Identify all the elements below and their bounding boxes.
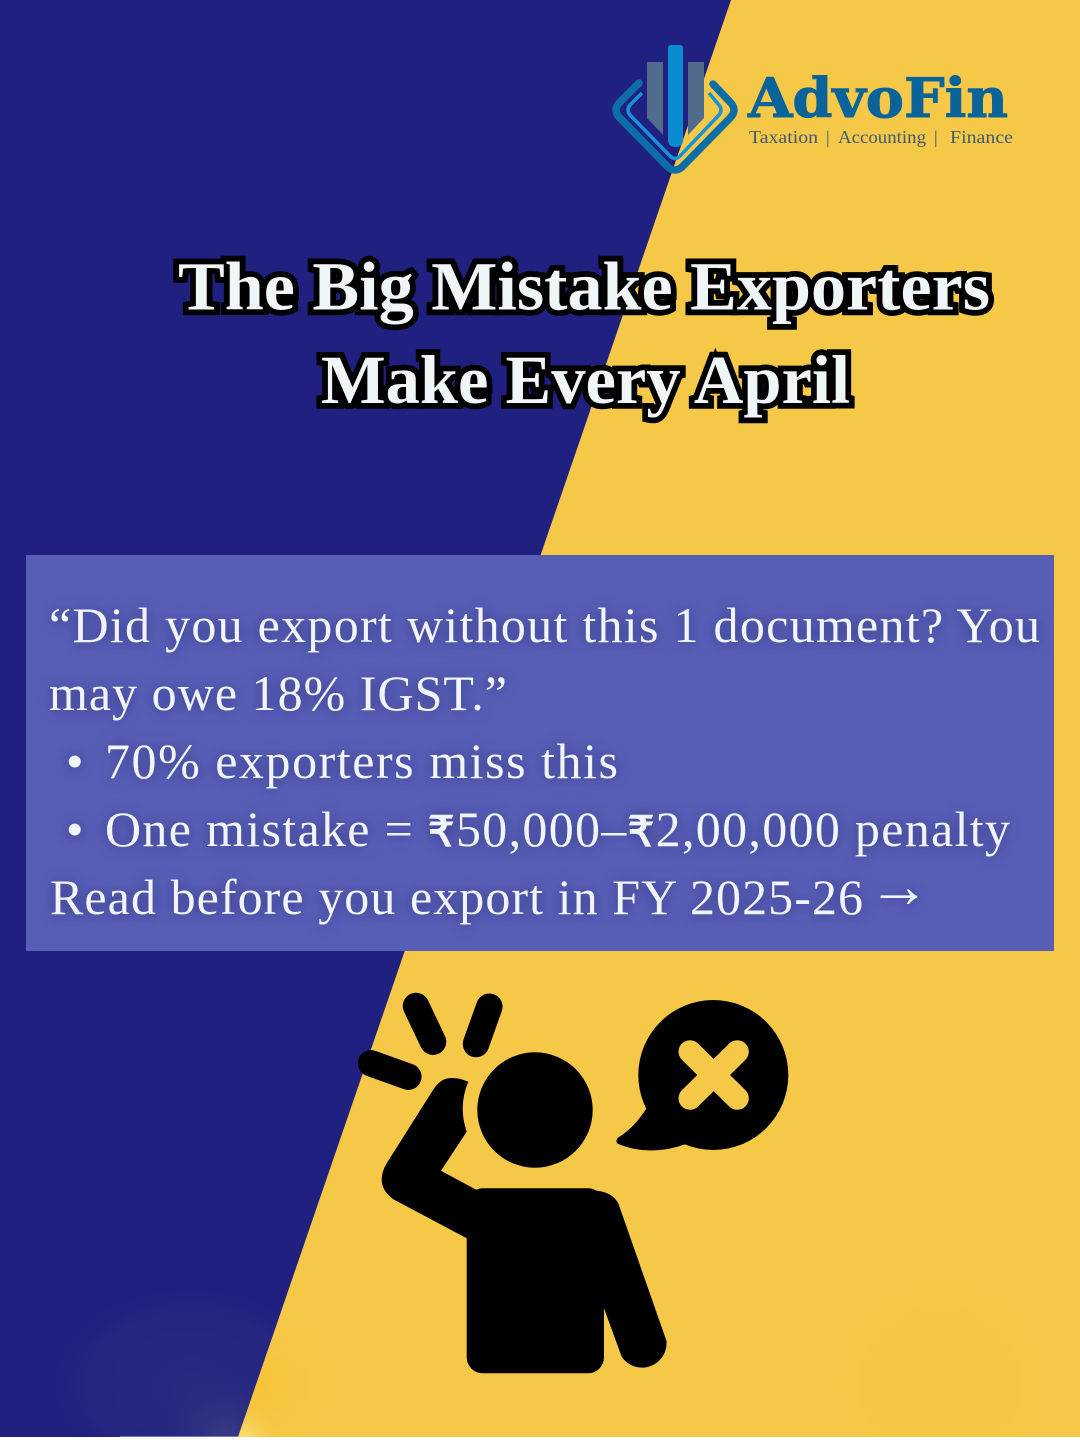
panel text: • [66, 801, 84, 857]
person head [477, 1052, 593, 1168]
title [178, 248, 990, 418]
logo wordmark: AdvoFin [747, 66, 1008, 130]
smudge: bottom left retouched patch [120, 1310, 284, 1437]
impact marks [371, 1006, 489, 1077]
panel: hook message [26, 555, 1054, 951]
title: The Big Mistake Exporters [178, 248, 990, 324]
logo tagline: Taxation [749, 127, 818, 147]
person body [467, 1188, 604, 1373]
panel text: Read before you export in FY 2025-26 [50, 869, 863, 925]
panel text: → [868, 853, 930, 921]
person lowered arm [590, 1190, 667, 1368]
logo tagline: Accounting [838, 127, 926, 147]
panel text: One mistake = ₹50,000–₹2,00,000 penalty [105, 801, 1010, 857]
title: Make Every April [321, 342, 850, 418]
logo tagline: Finance [950, 127, 1013, 147]
logo tagline: | [826, 127, 830, 147]
panel text: “Did you export without this 1 document? You [49, 597, 1040, 653]
panel text [49, 597, 1040, 925]
icon: confused person with error speech bubble [371, 1000, 788, 1373]
panel text: • [66, 733, 84, 789]
person raised arm [382, 1078, 480, 1238]
logo tagline [749, 127, 1013, 147]
panel text: may owe 18% IGST.” [49, 665, 507, 721]
panel text: 70% exporters miss this [105, 733, 618, 789]
speech bubble [616, 1000, 788, 1150]
logo tagline: | [934, 127, 938, 147]
logo: AdvoFin [616, 45, 1013, 170]
smudge: bottom right retouched patch [830, 1290, 1050, 1437]
bubble x mark [690, 1052, 737, 1098]
icon: logo bars and diamond [616, 45, 734, 170]
